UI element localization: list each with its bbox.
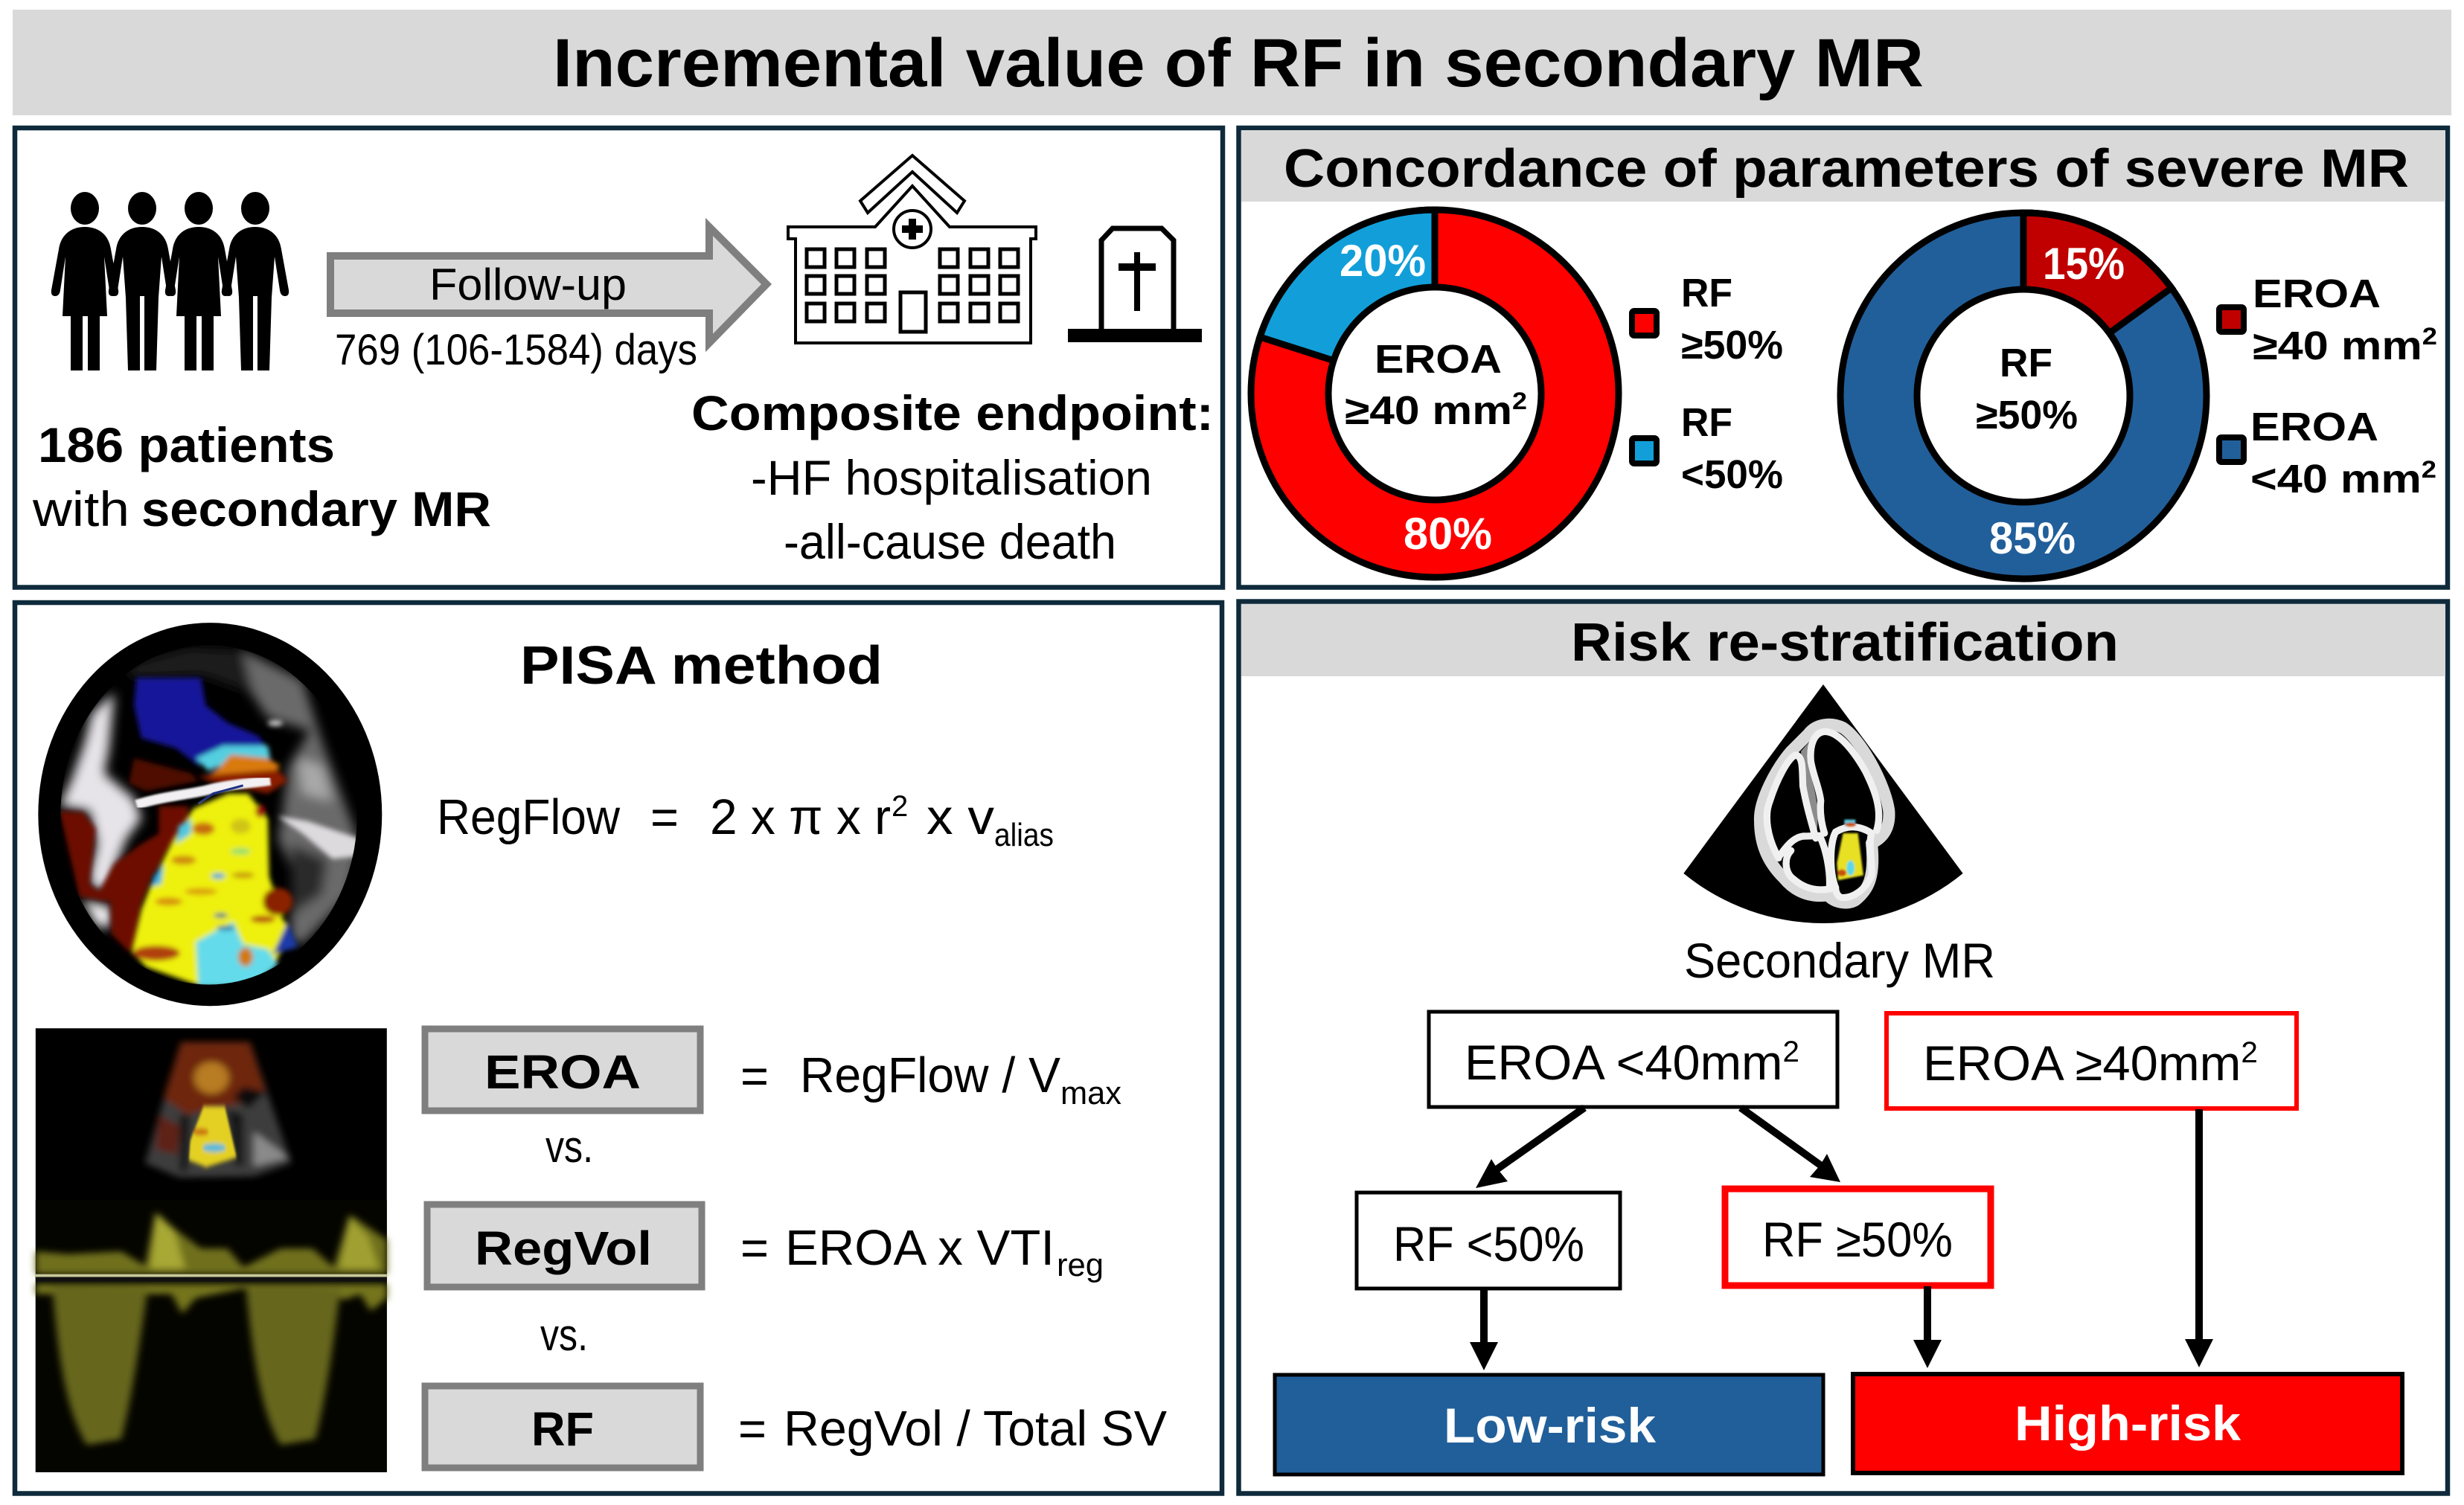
image: Doppler spectrum [36, 1028, 387, 1472]
panel: PISA method [15, 603, 1222, 1494]
icon: echo sector with heart [1683, 684, 1963, 923]
composite endpoint text [691, 385, 1214, 569]
legend: donut EROA: ≥50% [1681, 323, 1783, 368]
heading: PISA method: PISA method [520, 636, 883, 696]
box: high-risk: High-risk [2015, 1396, 2241, 1451]
box: low-risk: Low-risk [1444, 1398, 1656, 1453]
chart: donut EROA: 20% [1340, 236, 1426, 286]
arrow: to low-risk [1470, 1289, 1498, 1370]
chart: donut EROA: ≥40 mm [1345, 388, 1494, 433]
small colour sector [145, 1042, 291, 1178]
chart: donut RF: 85% [1989, 513, 2076, 563]
heading: risk re-stratification: Risk re-stratification [1571, 613, 2119, 673]
box: EROA at least 40: EROA ≥40mm [1923, 1036, 2236, 1091]
formula: EROA [740, 1047, 1121, 1111]
composite endpoint text: -all-cause death [784, 514, 1116, 569]
box: EROA at least 40: 2 [2241, 1036, 2258, 1069]
formula: RegVol [740, 1220, 1104, 1283]
box: RF: RF [531, 1402, 594, 1456]
chart: donut EROA: 80% [1404, 509, 1492, 559]
label: vs.: vs. [540, 1310, 588, 1360]
formula: EROA: max [1060, 1075, 1121, 1111]
box: EROA below 40: EROA <40mm [1465, 1035, 1780, 1090]
formula: RegFlow: RegFlow [437, 789, 621, 845]
patients text [32, 417, 491, 536]
chart: donut RF: RF [2000, 341, 2052, 385]
icon: group of patients [51, 192, 289, 370]
title banner: Incremental value of RF in secondary MR [553, 25, 1924, 101]
chart: donut RF [1840, 213, 2207, 579]
formula: RegFlow [437, 789, 1054, 853]
label: vs.: vs. [545, 1122, 593, 1172]
formula: RegFlow: x v [927, 789, 995, 845]
formula: RegVol: EROA x VTI [785, 1220, 1055, 1276]
heading: concordance: Concordance of parameters of severe MR [1284, 139, 2409, 199]
icon: gravestone [1068, 228, 1202, 342]
box: EROA below 40: 2 [1783, 1036, 1799, 1068]
box: EROA [425, 1029, 700, 1111]
image: colour Doppler PISA ellipse [38, 623, 382, 1006]
chart: donut RF: 15% [2043, 239, 2125, 289]
box: low-risk [1275, 1375, 1823, 1474]
formula: RegFlow: 2 [892, 790, 908, 823]
formula: RegVol: reg [1057, 1247, 1104, 1283]
formula: RegFlow: alias [994, 817, 1054, 853]
arrow: RF to high-risk [1913, 1286, 1942, 1368]
composite endpoint text: Composite endpoint: [691, 385, 1214, 440]
legend: donut RF [2219, 272, 2437, 501]
icon: hospital [788, 155, 1036, 343]
legend: donut EROA: RF [1681, 271, 1732, 315]
box: EROA: EROA [484, 1045, 641, 1099]
panel: study design [15, 128, 1223, 588]
formula: RegFlow: 2 x π x r [710, 789, 891, 845]
arrow: to RF at least 50 [1741, 1108, 1840, 1182]
patients text: with [32, 481, 129, 536]
chart: donut EROA: EROA [1375, 337, 1502, 382]
chart: donut RF: ≥50% [1976, 393, 2078, 437]
box: RF at least 50: RF ≥50% [1762, 1212, 1953, 1267]
box: RegVol: RegVol [475, 1222, 652, 1275]
formula: RegFlow: = [650, 789, 679, 845]
formula: RF: = [738, 1401, 767, 1457]
arrow: to RF below 50 [1476, 1108, 1584, 1188]
box: EROA at least 40 [1887, 1013, 2297, 1108]
legend: donut RF: <40 mm [2250, 457, 2401, 501]
arrow: follow-up [330, 227, 767, 343]
box: RF [425, 1386, 700, 1468]
legend: donut RF: 2 [2422, 323, 2437, 350]
arrow: EROA to high-risk [2185, 1109, 2213, 1367]
composite endpoint text: -HF hospitalisation [751, 450, 1152, 505]
legend: donut RF: ≥40 mm [2253, 324, 2402, 368]
box: EROA below 40 [1429, 1012, 1837, 1107]
panel: concordance of parameters [1238, 128, 2448, 588]
box: RF below 50 [1357, 1193, 1620, 1289]
box: RegVol [427, 1204, 702, 1287]
spectral trace [36, 1212, 387, 1445]
legend: donut EROA: RF [1681, 400, 1732, 445]
formula: RegVol: = [740, 1220, 769, 1276]
legend: donut EROA: <50% [1681, 452, 1783, 497]
panel: risk re-stratification [1238, 601, 2448, 1494]
box: high-risk [1853, 1374, 2402, 1473]
arrow: follow-up: Follow-up [429, 260, 627, 309]
legend: donut RF: EROA [2253, 272, 2381, 316]
follow-up duration: 769 (106-1584) days [335, 326, 697, 374]
formula: RF: RegVol / Total SV [784, 1401, 1167, 1457]
title banner [13, 10, 2451, 115]
chart: donut EROA: 2 [1512, 388, 1527, 414]
label: secondary MR: Secondary MR [1684, 933, 1995, 988]
patients text: 186 patients [38, 417, 335, 472]
chart: donut EROA [1251, 210, 1619, 577]
formula: EROA: RegFlow / V [800, 1047, 1060, 1103]
box: RF at least 50 [1725, 1189, 1991, 1286]
legend: donut EROA [1632, 271, 1783, 497]
legend: donut RF: 2 [2422, 456, 2436, 483]
legend: donut RF: EROA [2250, 405, 2378, 449]
box: RF below 50: RF <50% [1393, 1216, 1584, 1271]
formula: EROA: = [740, 1048, 769, 1104]
patients text: secondary MR [141, 481, 491, 536]
